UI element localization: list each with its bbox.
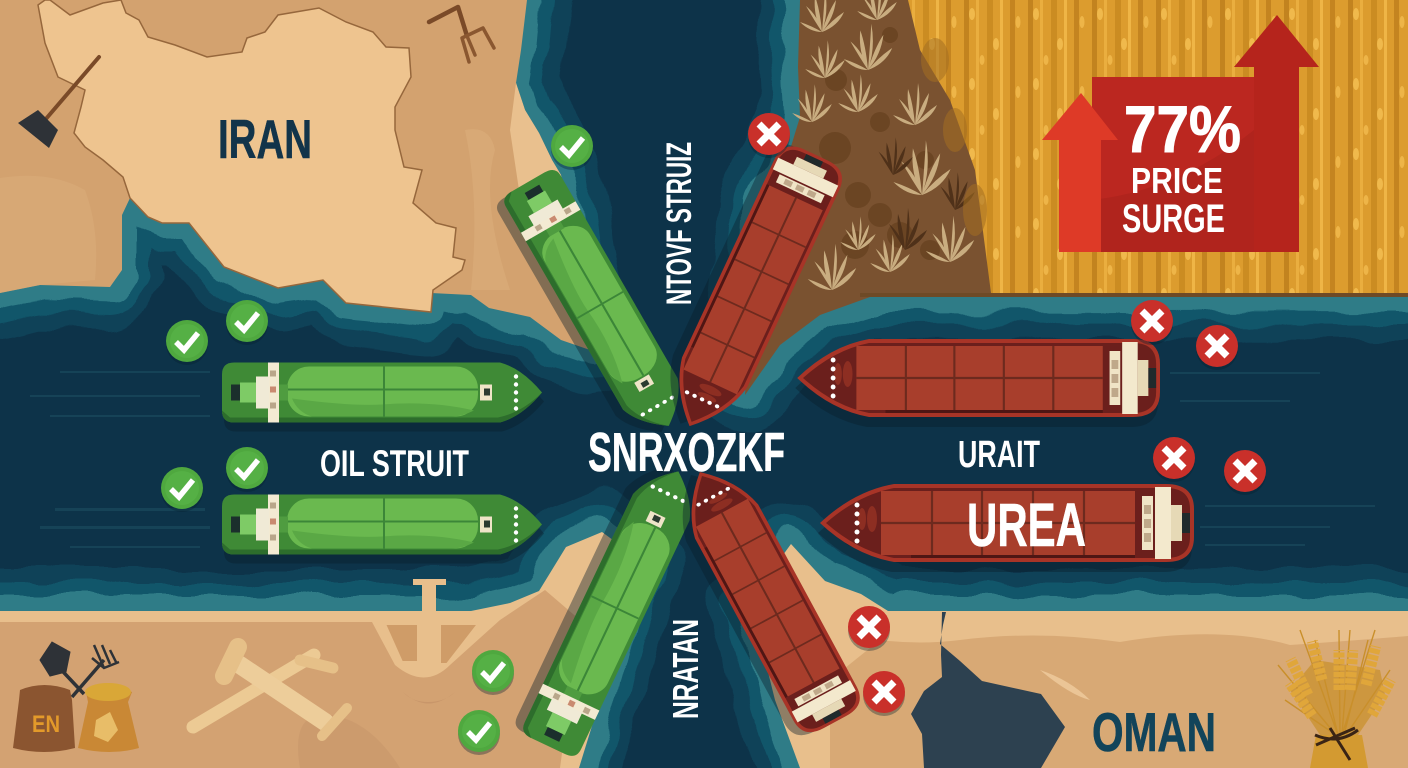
icon: crossed tools	[193, 647, 347, 736]
water: wake streaks	[30, 371, 1375, 548]
label: SNRXOZKF: SNRXOZKF	[588, 421, 785, 483]
label: OIL STRUIT: OIL STRUIT	[320, 443, 469, 484]
label: OMAN: OMAN	[1092, 701, 1216, 763]
land: southern coast	[0, 532, 640, 768]
label: SURGE: SURGE	[1122, 197, 1225, 241]
tanker: green north	[493, 166, 697, 448]
icon: hoe	[18, 57, 99, 148]
land: northern coast	[0, 0, 590, 350]
land: Oman coast	[750, 544, 1408, 768]
icon: grain sacks	[13, 683, 139, 752]
land: dark Oman gulf shape	[911, 612, 1065, 768]
label: NRATAN: NRATAN	[665, 619, 706, 719]
label: PRICE: PRICE	[1131, 160, 1223, 201]
tanker: green west upper	[222, 362, 544, 432]
icons: green check badges	[161, 125, 593, 755]
icons: red cross badges	[748, 113, 1266, 716]
label: IRAN: IRAN	[218, 108, 312, 170]
tanker: green west lower	[222, 494, 544, 564]
label: URAIT: URAIT	[958, 434, 1040, 476]
cargo ship: red south	[659, 454, 867, 743]
icon: pitchfork	[429, 7, 494, 62]
land: brown farmland	[745, 0, 1408, 395]
dried plants	[792, 0, 975, 290]
tanker: green south	[511, 452, 707, 759]
price surge arrows	[1042, 15, 1319, 252]
icon: grain sacks: EN	[32, 711, 60, 738]
cargo ship: red east upper	[795, 339, 1160, 427]
jetty and harbour	[385, 579, 478, 704]
cargo ship: red north	[648, 136, 849, 443]
icon: shovel and fork	[40, 642, 119, 697]
land: Iran	[38, 0, 465, 312]
label: NTOVF STRUIZ: NTOVF STRUIZ	[660, 142, 699, 305]
label: 77%: 77%	[1124, 92, 1241, 166]
cargo ship: red east lower	[818, 484, 1194, 572]
land: golden wheat field	[860, 0, 1408, 295]
label: UREA: UREA	[967, 491, 1086, 559]
icon: wheat sheaf	[1278, 630, 1391, 768]
